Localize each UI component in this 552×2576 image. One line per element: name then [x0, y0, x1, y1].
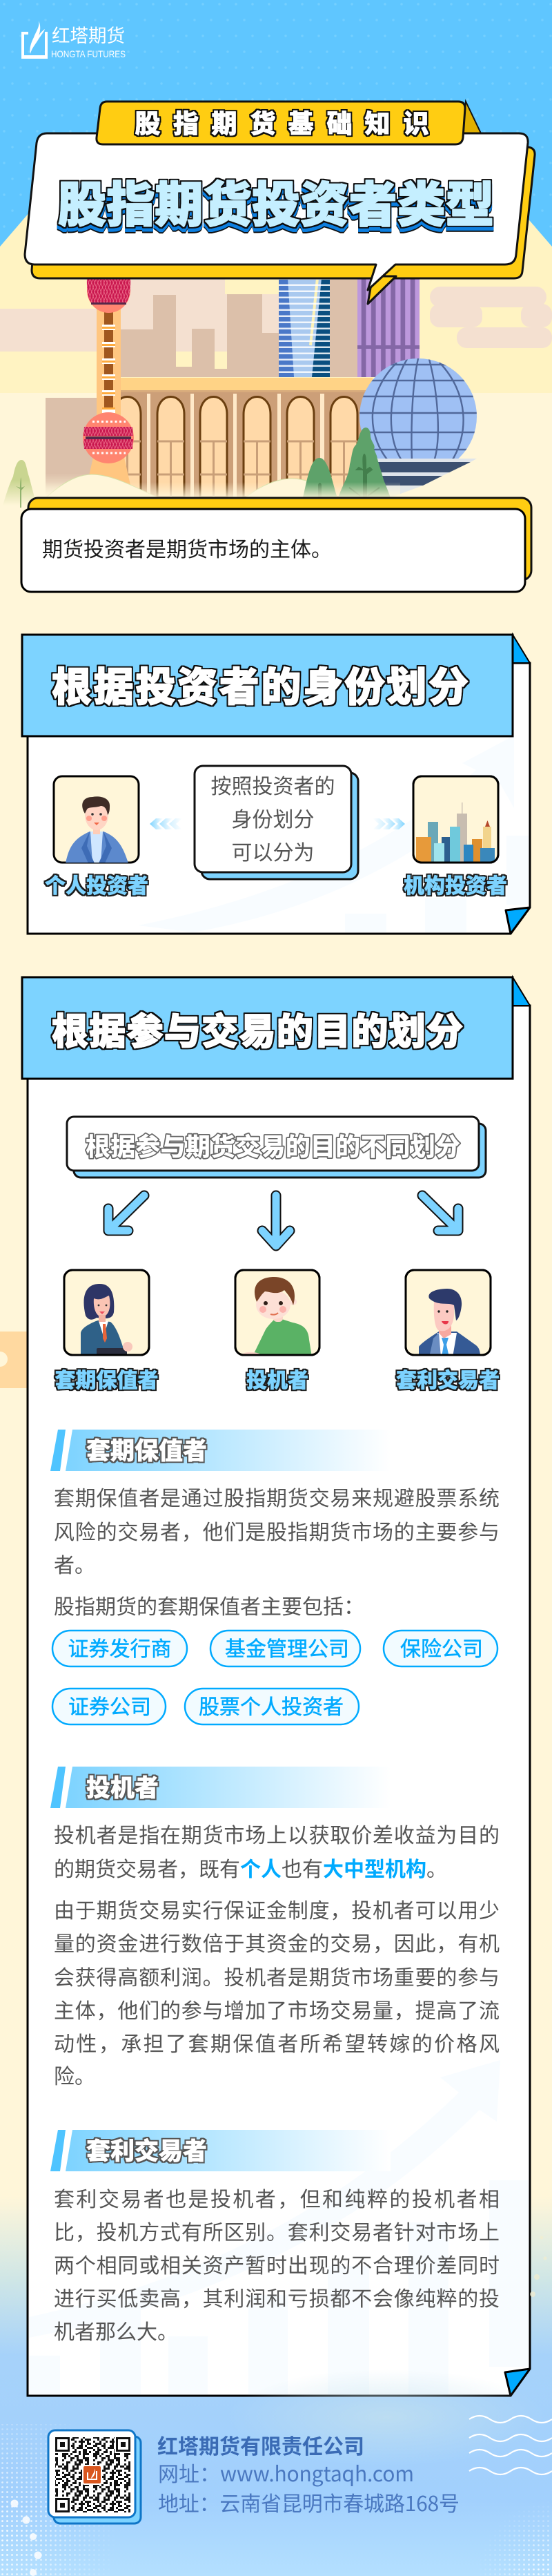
text block: hedger — [54, 1488, 500, 1619]
text block: speculator: 会获得高额利润。投机者是期货市场重要的参与 — [54, 1967, 500, 1990]
subhead: hedger — [50, 1430, 391, 1471]
pale background buildings — [0, 278, 552, 352]
section heading: 根据参与交易的目的划分 — [52, 1011, 463, 1052]
subhead: hedger: 套期保值者 — [86, 1438, 207, 1465]
lower sphere — [83, 412, 134, 463]
callout box: 按照投资者的 — [211, 776, 335, 798]
website: 网址： — [158, 2457, 220, 2488]
callout box: 可以分为 — [232, 842, 315, 865]
sub-heading box: 根据参与期货交易的目的不同划分 — [86, 1133, 460, 1161]
text block: arbitrageur: 进行买低卖高，其利润和亏损都不会像纯粹的投 — [54, 2288, 500, 2311]
QR centre logo — [82, 2465, 102, 2485]
company info: www.hongtaqh.com — [220, 2457, 414, 2488]
text block: hedger: 者。 — [54, 1555, 95, 1577]
kicker text: 知 — [364, 110, 391, 138]
subhead: speculator — [50, 1767, 391, 1808]
hero hill — [0, 166, 552, 393]
corner fold — [505, 2369, 530, 2396]
city fade — [41, 482, 400, 498]
label: speculator: 投机者 — [246, 1369, 308, 1392]
chips: hedger types: 保险公司 — [400, 1638, 483, 1661]
text block: speculator: 动性，承担了套期保值者所希望转嫁的价格风 — [54, 2033, 500, 2056]
logo english: HONGTA FUTURES — [51, 49, 126, 59]
sub-heading box — [67, 1117, 486, 1178]
company name: 红塔期货有限责任公司 — [157, 2430, 364, 2460]
top fold — [513, 977, 530, 1006]
kicker tag — [97, 102, 465, 144]
text block: hedger: 股指期货的套期保值者主要包括： — [54, 1596, 364, 1619]
kicker text: 股 — [135, 110, 160, 138]
subhead: speculator: 投机者 — [86, 1775, 159, 1802]
kicker text: 货 — [250, 110, 276, 138]
arrow: left — [108, 1195, 144, 1231]
title banner — [25, 102, 535, 304]
section header band — [22, 977, 513, 1079]
kicker text: 识 — [403, 110, 429, 138]
chips: hedger types: 证券发行商 — [68, 1638, 171, 1661]
chips: hedger types — [52, 1631, 497, 1724]
tan buildings — [121, 278, 359, 377]
footer decorations — [0, 2236, 552, 2576]
text block: arbitrageur — [54, 2189, 500, 2344]
text block: speculator: 量的资金进行数倍于其资金的交易，因此，有机 — [54, 1933, 500, 1956]
top fold — [513, 635, 530, 663]
text block: speculator: 险。 — [54, 2066, 95, 2088]
right chevrons — [373, 818, 405, 829]
QR finder marks — [55, 2436, 131, 2513]
text block: speculator: 由于期货交易实行保证金制度，投机者可以用少 — [54, 1900, 500, 1923]
logo icon — [21, 21, 48, 59]
Oriental Pearl tower — [83, 267, 134, 497]
kicker text: 基 — [288, 110, 313, 138]
chips: hedger types: 证券公司 — [68, 1696, 151, 1719]
corner fold — [506, 907, 530, 934]
label: arbitrageur: 套利交易者 — [396, 1369, 500, 1392]
text block: arbitrageur: 两个相同或相关资产暂时出现的不合理价差同时 — [54, 2255, 500, 2278]
decorative orange strip — [0, 1332, 29, 1388]
text block: hedger: 套期保值者是通过股指期货交易来规避股票系统 — [54, 1488, 500, 1510]
Shanghai tower — [279, 278, 330, 377]
callout box: 身份划分 — [232, 809, 315, 832]
left tan building — [46, 398, 101, 499]
text block: speculator — [54, 1825, 500, 2088]
yellow back card — [32, 147, 535, 278]
panel body — [28, 1006, 530, 2396]
colonnade building — [114, 378, 373, 497]
chips: hedger types: 股票个人投资者 — [199, 1696, 344, 1719]
kicker text: 指 — [173, 110, 199, 138]
globe building — [359, 358, 477, 494]
kicker text: 期 — [211, 110, 237, 138]
upper sphere — [87, 267, 130, 313]
text block: speculator: 主体，他们的参与增加了市场交易量，提高了流 — [54, 2000, 500, 2023]
speech tail — [368, 276, 396, 304]
text block: speculator: 的期货交易者，既有个人也有大中型机构。 — [54, 1858, 447, 1881]
institution city portrait — [413, 776, 498, 863]
text block: arbitrageur: 比，投机方式有所区别。套利交易者针对市场上 — [54, 2222, 500, 2245]
individual investor portrait — [54, 776, 139, 863]
text block: arbitrageur: 套利交易者也是投机者，但和纯粹的投机者相 — [54, 2189, 500, 2211]
logo — [21, 21, 126, 59]
trees — [303, 427, 391, 498]
hero city illustration — [0, 267, 552, 508]
panel: by identity — [22, 635, 530, 934]
company info — [157, 2430, 460, 2517]
foreground hills — [46, 474, 338, 498]
tag fold — [462, 102, 481, 133]
watermark chart — [29, 2060, 529, 2394]
subhead: arbitrageur — [50, 2130, 391, 2171]
QR code card — [48, 2430, 141, 2524]
panel: by trading purpose — [22, 977, 530, 2396]
text block: arbitrageur: 机者那么大。 — [54, 2321, 178, 2344]
individual investor label: 个人投资者 — [45, 875, 148, 898]
left pale tree — [3, 460, 37, 508]
text block: hedger: 风险的交易者，他们是股指期货市场的主要参与 — [54, 1521, 500, 1544]
left chevrons — [150, 818, 182, 829]
chips: hedger types: 基金管理公司 — [225, 1638, 349, 1661]
label: hedger: 套期保值者 — [55, 1369, 159, 1392]
hero sky — [0, 0, 552, 250]
institution investor label: 机构投资者 — [404, 875, 507, 898]
main title: 股指期货投资者类型 — [58, 178, 494, 232]
portrait: arbitrageur — [406, 1270, 491, 1357]
logo text: 红塔期货 — [52, 21, 125, 48]
intro text: 期货投资者是期货市场的主体。 — [42, 539, 332, 561]
callout box — [195, 766, 358, 879]
cream gaps — [177, 278, 279, 369]
purple tower — [357, 278, 420, 377]
kicker text: 础 — [327, 110, 352, 138]
arrow: centre — [262, 1195, 290, 1246]
text block: speculator: 投机者是指在期货市场上以获取价差收益为目的 — [54, 1825, 500, 1847]
kicker text — [135, 110, 429, 138]
address: 地址：云南省昆明市春城路168号 — [158, 2487, 460, 2517]
watermark chart — [138, 736, 529, 932]
arrow: right — [422, 1195, 458, 1231]
section header band — [22, 635, 513, 736]
subhead: arbitrageur: 套利交易者 — [86, 2137, 207, 2165]
portrait: speculator — [235, 1270, 319, 1357]
panel body — [28, 663, 530, 934]
section heading: 根据投资者的身份划分 — [52, 665, 469, 710]
intro card — [21, 498, 531, 592]
portrait: hedger — [64, 1270, 149, 1357]
white title card — [25, 133, 528, 290]
